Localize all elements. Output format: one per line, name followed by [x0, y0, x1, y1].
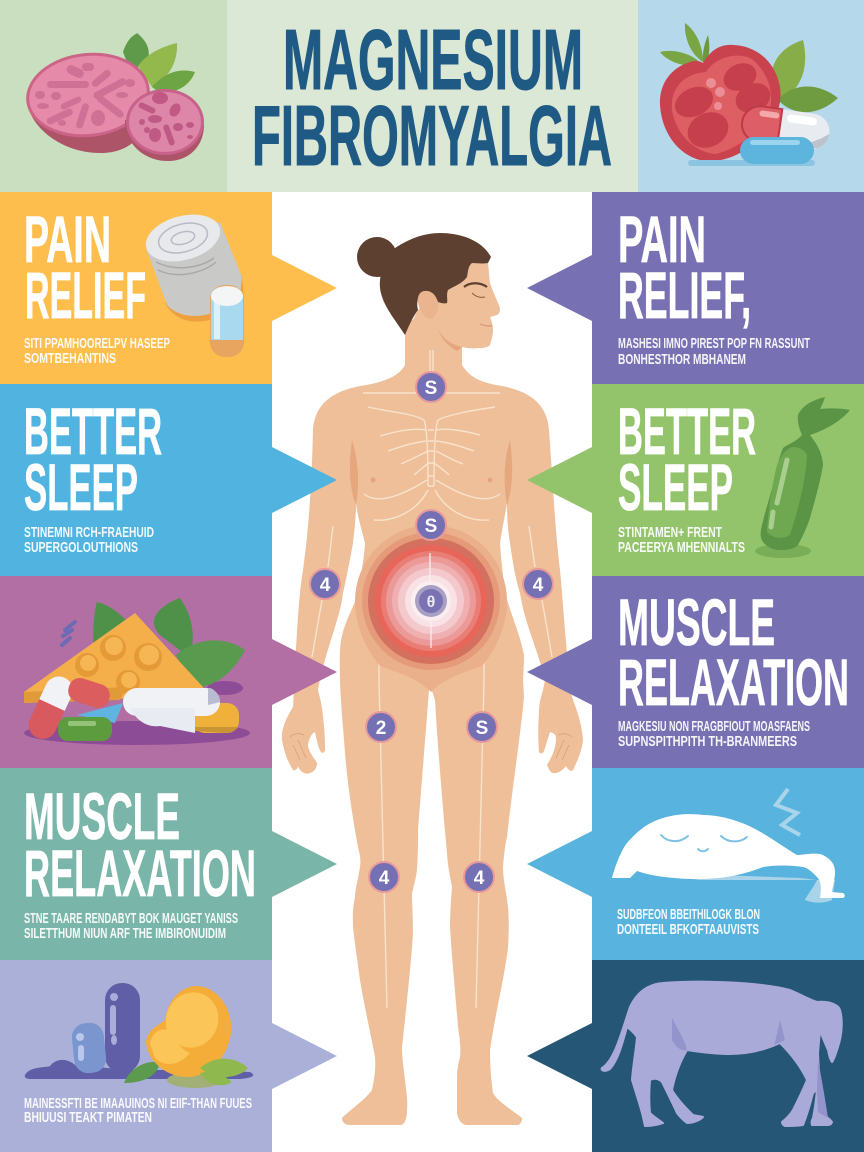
body silhouette: [282, 320, 583, 1125]
text block: sleeping panel caption: SUDBFEON BBEITHILOGK BLON: [617, 906, 760, 923]
text block: better sleep right caption: [618, 524, 745, 556]
badge: 4 right arm: 4: [533, 575, 544, 596]
heading: better sleep left: BETTER: [24, 394, 162, 468]
text block: better sleep left caption: [24, 524, 154, 556]
badge: 4 right knee: 4: [474, 868, 485, 889]
badge: 4 left arm: [310, 569, 340, 599]
panel: animal silhouette navy: [527, 960, 864, 1152]
figure: human body with pain points: [282, 233, 583, 1125]
heading: pain relief right: PAIN: [618, 202, 706, 276]
text block: pain relief right caption: [618, 335, 810, 368]
panel: pain relief orange: RELIEF: [25, 258, 146, 332]
panel: header right with fruit and pills: [638, 0, 864, 192]
badge: 4 left knee: 4: [379, 868, 390, 889]
text block: pain relief left caption: SOMTBEHANTINS: [24, 350, 116, 367]
face: [405, 262, 500, 348]
heading: muscle relaxation left: MUSCLE: [24, 779, 180, 853]
text block: better sleep left caption: STINEMNI RCH-FRAEHUID: [24, 524, 154, 541]
pain target rings: [355, 525, 507, 692]
panel: pills and cheese purple: [0, 576, 337, 768]
hair: [380, 233, 491, 335]
badge: 2 left thigh: [366, 712, 396, 742]
panel: better sleep blue: [0, 384, 337, 576]
text block: better sleep right caption: PACEERYA MHENNIALTS: [618, 539, 745, 556]
badge: 4 left knee: [369, 862, 399, 892]
badge: S right thigh: [467, 712, 497, 742]
panel: supplements and lemon lavender: [0, 960, 337, 1152]
badge: S upper chest: S: [425, 378, 437, 399]
text block: better sleep left caption: SUPERGOLOUTHIONS: [24, 539, 138, 556]
panel: better sleep blue: SLEEP: [24, 450, 138, 524]
badge: S upper chest: [416, 372, 446, 402]
arm shadows: [350, 440, 512, 505]
text block: muscle relaxation left caption: STNE TAARE RENDABYT BOK MAUGET YANISS: [24, 910, 238, 927]
text block: muscle relaxation right caption: [618, 718, 810, 750]
text block: pain relief left caption: [24, 335, 170, 367]
icon: drooping animal silhouette: [602, 982, 842, 1126]
panel: header left with meat slices: [0, 0, 227, 192]
icon: capsules and lemon: [25, 983, 253, 1088]
ear: [418, 291, 438, 319]
hand creases: [290, 734, 572, 760]
panel: header title: [227, 0, 638, 192]
badge: 4 right arm: [523, 569, 553, 599]
icon: sleeping white figure: [612, 789, 845, 903]
face features: [464, 283, 487, 287]
heading: title line one: MAGNESIUM: [283, 13, 583, 108]
badge: S right thigh: S: [476, 718, 488, 739]
rib lines: [312, 350, 552, 1008]
panel: better sleep right green: [527, 384, 864, 576]
icon: canister and vial: [141, 207, 244, 357]
text block: lavender panel caption: BHIUUSI TEAKT PIMATEN: [24, 1109, 152, 1126]
panel: better sleep right green: SLEEP: [618, 450, 733, 524]
icon: pill pile with leaves: [24, 598, 250, 745]
panel: pain relief right purple: RELIEF,: [618, 258, 751, 332]
text block: muscle relaxation left caption: SILETTHUM NIUN ARF THE IMBIRONUIDIM: [24, 925, 226, 942]
badge: 2 left thigh: 2: [376, 718, 386, 739]
panel: pain relief orange: [0, 192, 337, 384]
panel: pain relief right purple: [527, 192, 864, 384]
text block: pain relief left caption: SITI PPAMHOORELPV HASEEP: [24, 335, 170, 352]
text block: muscle relaxation right caption: SUPNSPITHPITH TH-BRANMEERS: [618, 733, 797, 750]
badge: S lower chest: S: [425, 516, 437, 537]
badge: S lower chest: [416, 510, 446, 540]
panel: muscle relaxation teal: RELAXATION: [24, 836, 256, 910]
jaw shadow: [438, 327, 462, 351]
text block: muscle relaxation left caption: [24, 910, 238, 942]
text block: sleeping panel caption: [617, 906, 760, 938]
panel: sleeping figure blue: [527, 768, 864, 960]
panel: muscle relaxation right purple: [527, 576, 864, 768]
text block: better sleep right caption: STINTAMEN+ FRENT: [618, 524, 722, 541]
text block: lavender panel caption: [24, 1095, 252, 1126]
badge: 4 right knee: [464, 862, 494, 892]
text block: pain relief right caption: BONHESTHOR MBHANEM: [618, 351, 746, 368]
heading: pain relief left: PAIN: [24, 202, 111, 276]
panel: muscle relaxation teal: [0, 768, 337, 960]
text block: lavender panel caption: MAINESSFTI BE IMAAUINOS NI EIIF-THAN FUUES: [24, 1095, 252, 1112]
pain target rings: θ: [427, 594, 435, 611]
text block: sleeping panel caption: DONTEEIL BFKOFTAAUVISTS: [617, 921, 759, 938]
icon: green bottle with leaf: [755, 397, 850, 558]
badge: 4 left arm: 4: [320, 575, 331, 596]
